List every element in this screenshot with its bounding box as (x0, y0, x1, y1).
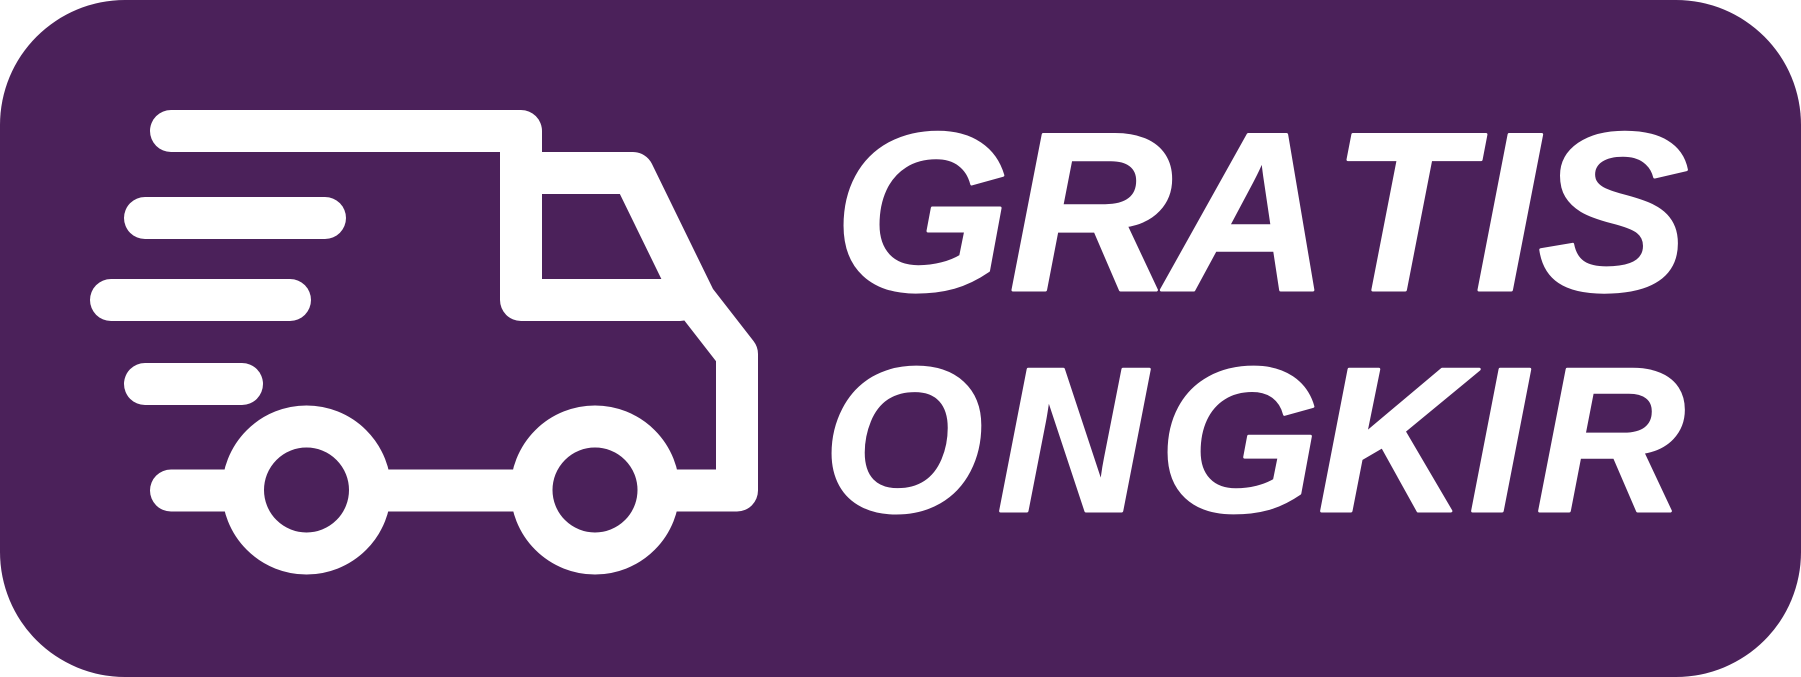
truck cab and chassis outline (171, 173, 737, 490)
front wheel (532, 426, 658, 554)
truck cargo outline (171, 131, 680, 300)
speed line 3 (145, 363, 242, 405)
heading: GRATIS: GRATIS (834, 85, 1689, 338)
speed line 2 (111, 279, 290, 321)
icon: delivery truck (111, 131, 737, 554)
speed line 1 (145, 197, 325, 239)
heading: ONGKIR: ONGKIR (823, 325, 1685, 555)
rear wheel (243, 426, 370, 554)
